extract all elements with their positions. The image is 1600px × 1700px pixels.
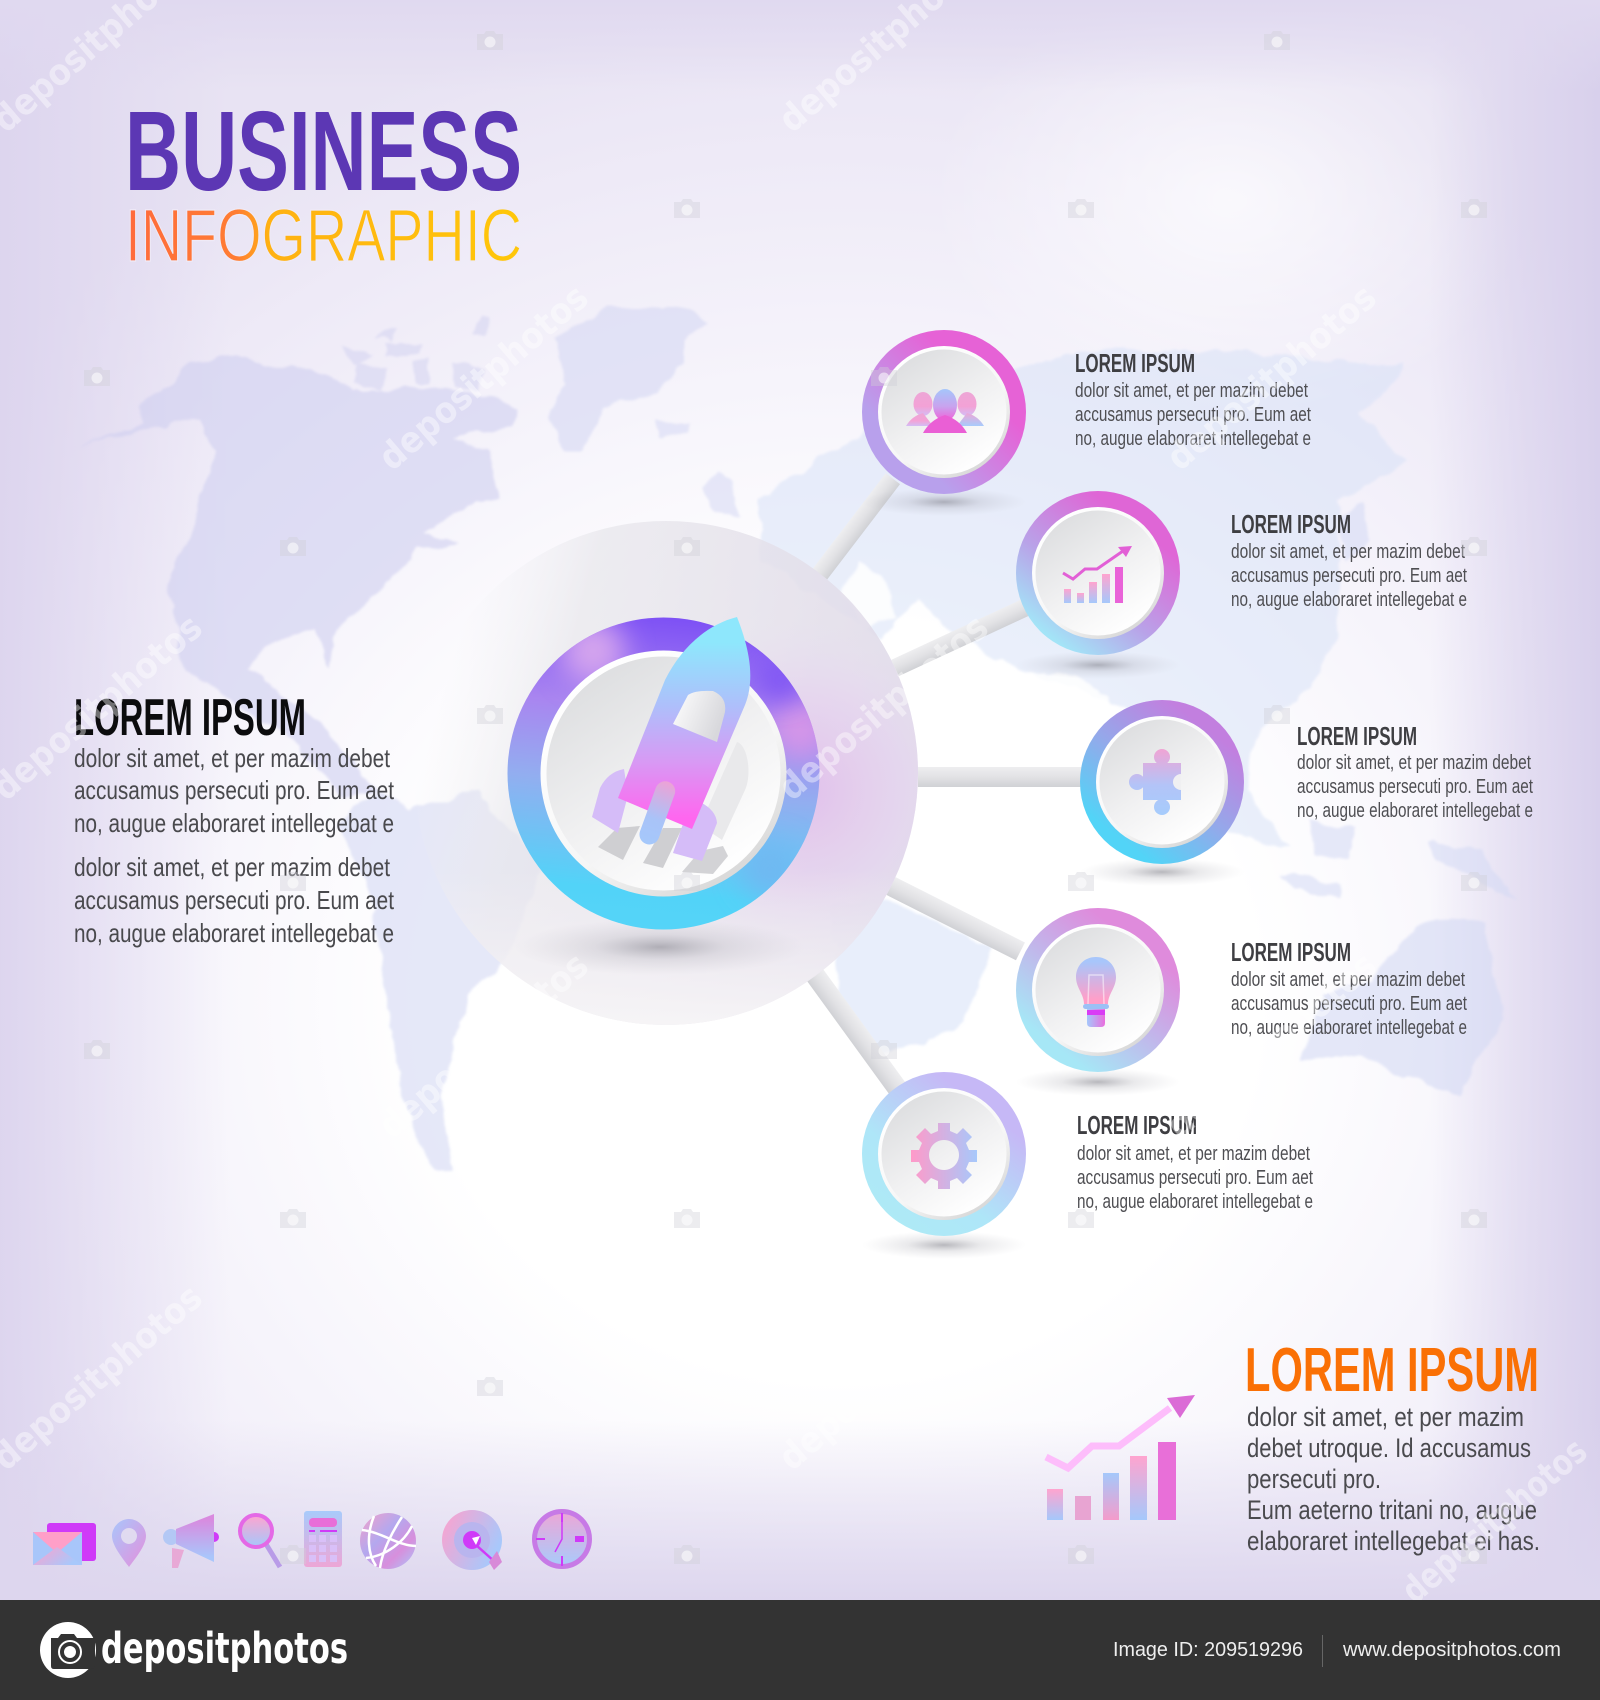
text: node 2: accusamus persecuti pro. Eum aet	[1231, 565, 1467, 587]
text: node 1	[1075, 348, 1311, 450]
left text block: no, augue elaboraret intellegebat e	[74, 918, 394, 948]
bottom right text block: persecuti pro.	[1247, 1464, 1381, 1494]
left text block: accusamus persecuti pro. Eum aet	[74, 885, 395, 915]
text: node 3: no, augue elaboraret intellegebat e	[1297, 800, 1533, 822]
watermark text and camera marks: depositphotos	[771, 607, 997, 809]
left text block: dolor sit amet, et per mazim debet	[74, 743, 391, 773]
central rocket badge	[508, 617, 830, 975]
icon: light bulb	[1076, 957, 1116, 1027]
text: node 4: accusamus persecuti pro. Eum aet	[1231, 993, 1467, 1015]
text: node 5: LOREM IPSUM	[1077, 1110, 1197, 1140]
text: node 5: dolor sit amet, et per mazim debet	[1077, 1143, 1310, 1165]
icon: puzzle	[1129, 749, 1181, 815]
text: node 3: LOREM IPSUM	[1297, 721, 1417, 751]
text: node 4: no, augue elaboraret intellegebat e	[1231, 1017, 1467, 1039]
left text block: LOREM IPSUM	[74, 689, 306, 747]
shadow	[515, 919, 805, 975]
image id: Image ID: 209519296	[1113, 1639, 1303, 1661]
text: node 4: LOREM IPSUM	[1231, 937, 1351, 967]
icon: globe	[360, 1513, 416, 1569]
text: node 5	[1077, 1110, 1313, 1213]
text: node 1: no, augue elaboraret intellegebat e	[1075, 428, 1311, 450]
icon: growth chart	[1063, 546, 1132, 603]
text: node 2: LOREM IPSUM	[1231, 509, 1351, 539]
title	[125, 88, 522, 277]
left text block: no, augue elaboraret intellegebat e	[74, 808, 394, 838]
text: node 2	[1231, 509, 1467, 611]
left text block: dolor sit amet, et per mazim debet	[74, 852, 391, 882]
logo: camera badge	[40, 1622, 96, 1678]
icon: clock	[534, 1512, 590, 1566]
text: node 3	[1297, 721, 1533, 822]
icon: magnifier	[240, 1515, 280, 1567]
icon: target	[442, 1510, 502, 1570]
text: node 5: accusamus persecuti pro. Eum aet	[1077, 1167, 1313, 1189]
icon row	[33, 1510, 590, 1570]
text: node 1: accusamus persecuti pro. Eum aet	[1075, 404, 1311, 426]
watermark text and camera marks: depositphotos	[1159, 945, 1385, 1147]
title: BUSINESS	[125, 88, 522, 214]
bar chart with trend arrow	[1046, 1395, 1195, 1520]
icon: people	[906, 389, 984, 433]
watermark text and camera marks: depositphotos	[371, 277, 597, 479]
icon: calculator	[304, 1511, 342, 1567]
gradient ring	[508, 618, 830, 930]
bottom right text block: debet utroque. Id accusamus	[1247, 1433, 1531, 1463]
text: node 3: accusamus persecuti pro. Eum aet	[1297, 776, 1533, 798]
icon: megaphone	[163, 1514, 219, 1568]
node 3: puzzle	[1080, 700, 1244, 886]
icon: envelope	[33, 1523, 96, 1565]
text: node 4	[1231, 937, 1467, 1039]
watermark text and camera marks: depositphotos	[371, 945, 597, 1147]
icon: rocket	[592, 617, 750, 874]
text: node 5: no, augue elaboraret intellegebat e	[1077, 1191, 1313, 1213]
title: INFOGRAPHIC	[125, 194, 522, 277]
node 1: team	[862, 330, 1026, 516]
text: node 4: dolor sit amet, et per mazim debet	[1231, 969, 1465, 991]
logo wordmark: depositphotos	[101, 1624, 348, 1674]
watermark text and camera marks: depositphotos	[1159, 277, 1385, 479]
bottom right text block: elaboraret intellegebat ei has.	[1247, 1526, 1540, 1556]
left text block	[74, 689, 395, 948]
footer bar	[0, 1600, 1600, 1700]
text: node 1: dolor sit amet, et per mazim debet	[1075, 380, 1308, 402]
world map	[77, 307, 1514, 1173]
text: node 2: dolor sit amet, et per mazim debet	[1231, 541, 1465, 563]
text: node 2: no, augue elaboraret intellegebat e	[1231, 589, 1467, 611]
node 4: light bulb	[1016, 908, 1180, 1096]
node 5: gear	[862, 1072, 1026, 1259]
text: node 3: dolor sit amet, et per mazim debet	[1297, 752, 1531, 774]
connector bars	[807, 473, 1088, 1102]
node 2: growth chart	[1016, 491, 1180, 679]
site url: www.depositphotos.com	[1342, 1639, 1561, 1661]
icon: gear	[911, 1123, 977, 1189]
bottom right text block: dolor sit amet, et per mazim	[1247, 1402, 1524, 1432]
watermark text and camera marks: depositphotos	[771, 1277, 997, 1479]
text: node 1: LOREM IPSUM	[1075, 348, 1195, 378]
bottom right text block	[1245, 1336, 1540, 1556]
icon: map pin	[112, 1519, 146, 1567]
left text block: accusamus persecuti pro. Eum aet	[74, 775, 395, 805]
translucent bubble behind rocket	[414, 521, 918, 1025]
bottom right text block: Eum aeterno tritani no, augue	[1247, 1495, 1537, 1525]
